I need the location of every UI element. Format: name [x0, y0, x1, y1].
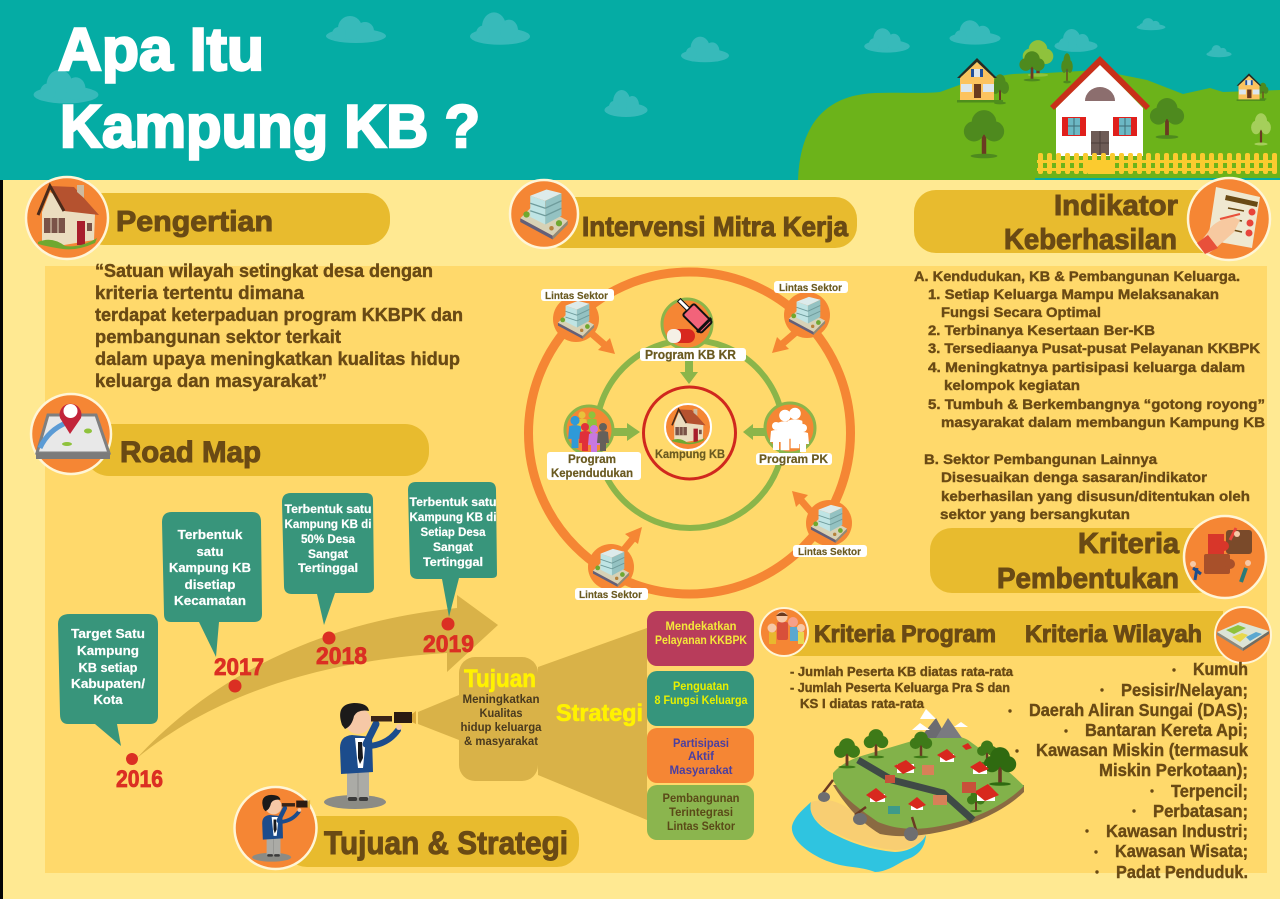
milestone 2019: Tertinggal: [423, 555, 483, 569]
node: program pk: Program PK: [759, 452, 828, 466]
milestone 2016: KB setiap: [78, 660, 138, 675]
trees: [964, 40, 1271, 158]
centre node: kampung kb: Kampung KB: [655, 447, 725, 461]
milestone 2017: satu: [196, 544, 224, 559]
strategy box 4: [647, 785, 754, 840]
node: lintas sektor bottom right: [793, 500, 867, 558]
node: lintas sektor top right: [774, 281, 848, 338]
strategy box 1: Mendekatkan: [666, 621, 736, 633]
illustration: village island: [792, 709, 1024, 872]
kriteria wilayah list: Miskin Perkotaan);: [1099, 760, 1248, 780]
strategy box 2: Penguatan: [673, 681, 729, 693]
icon: puzzle: [1184, 516, 1266, 598]
strategy box 1: Pelayanan KKBPK: [655, 635, 748, 647]
kriteria wilayah list: Pesisir/Nelayan;: [1121, 680, 1248, 700]
centre node: kampung kb: [655, 404, 725, 461]
milestone 2018: Kampung KB di: [284, 517, 372, 531]
node: program kb kr: [640, 293, 746, 362]
kriteria wilayah list: Kawasan Wisata;: [1115, 841, 1248, 861]
indikator list: 3. Tersediaanya Pusat-pusat Pelayanan KKBPK: [928, 340, 1260, 356]
milestone 2017: Kampung KB: [169, 560, 251, 575]
strategy box 3: Aktif: [688, 751, 714, 763]
definition text: dalam upaya meningkatkan kualitas hidup: [95, 349, 460, 369]
node: lintas sektor top right: Lintas Sektor: [779, 282, 842, 294]
tujuan box: hidup keluarga: [460, 720, 542, 734]
milestone 2016: Kabupaten/: [71, 676, 145, 691]
icon: house: [26, 177, 108, 259]
node: program pk: [756, 403, 832, 466]
strategy box 1: [647, 611, 754, 666]
milestone 2019: Kampung KB di: [410, 510, 496, 524]
kriteria wilayah list: Perbatasan;: [1153, 801, 1248, 821]
milestone 2019: 2019: [423, 631, 474, 658]
main house: [1050, 56, 1150, 156]
main content panel: [45, 266, 1267, 873]
panel: tujuan dan strategi: [234, 611, 754, 869]
strategy box 3: Masyarakat: [670, 765, 733, 777]
heading bar: kriteria program dan wilayah: [790, 611, 1223, 656]
indikator list: 5. Tumbuh & Berkembangnya “gotong royong”: [928, 396, 1265, 412]
milestone 2017: disetiap: [184, 577, 236, 592]
node: lintas sektor bottom left: Lintas Sektor: [579, 589, 642, 601]
icon: family: [760, 608, 808, 656]
strategy box 4: Terintegrasi: [669, 807, 733, 819]
panel: kriteria wilayah: [1008, 607, 1271, 882]
header banner: [0, 0, 1280, 180]
icon: map block: [1215, 607, 1271, 663]
indikator list: Disesuaikan denga sasaran/indikator: [941, 469, 1208, 485]
indikator list: masyarakat dalam membangun Kampung KB: [941, 414, 1265, 430]
small house left: [957, 58, 1003, 102]
kriteria program list: - Jumlah Peserta KB diatas rata-rata: [790, 664, 1014, 679]
indikator list: 2. Terbinanya Kesertaan Ber-KB: [928, 322, 1155, 338]
heading: kriteria pembentukan: Pembentukan: [997, 563, 1179, 595]
milestone 2017: 2017: [214, 654, 264, 681]
milestone 2019: Sangat: [433, 540, 473, 554]
title: Kampung KB ?: [60, 93, 480, 160]
heading: kriteria pembentukan: [930, 528, 1220, 595]
indikator list: B. Sektor Pembangunan Lainnya: [924, 451, 1157, 467]
milestone 2019: Terbentuk satu: [410, 495, 496, 509]
kriteria wilayah list: Bantaran Kereta Api;: [1085, 720, 1248, 740]
indikator list: sektor yang bersangkutan: [940, 506, 1130, 522]
milestone 2017: Terbentuk: [178, 527, 243, 542]
icon: checklist: [1188, 178, 1270, 260]
kriteria wilayah list: Kawasan Miskin (termasuk: [1036, 740, 1248, 760]
small house right: [1237, 73, 1265, 101]
tujuan box: & masyarakat: [464, 734, 538, 748]
strategy box 4: Pembangunan: [662, 793, 740, 805]
node: program kependudukan: Program: [568, 452, 616, 466]
tujuan box: [459, 657, 542, 781]
timeline arrow: [137, 595, 498, 758]
heading: pengertian: [80, 193, 390, 245]
arrows: programs to centre: [612, 360, 767, 441]
heading: indikator keberhasilan: Keberhasilan: [1004, 224, 1177, 256]
kriteria program list: - Jumlah Peserta Keluarga Pra S dan: [790, 680, 1010, 695]
panel: intervensi mitra kerja: [510, 180, 867, 601]
indikator list: kelompok kegiatan: [944, 377, 1080, 393]
milestone 2017: Kecamatan: [174, 593, 246, 608]
kriteria wilayah list: Terpencil;: [1171, 781, 1248, 801]
kriteria program list: [790, 664, 1014, 711]
node: lintas sektor bottom right: Lintas Sektor: [798, 546, 861, 558]
indikator list: A. Kendudukan, KB & Pembangunan Keluarga.: [914, 268, 1240, 284]
beam from telescope: [418, 628, 647, 820]
heading: intervensi mitra kerja: [540, 197, 857, 248]
indikator list: 1. Setiap Keluarga Mampu Melaksanakan: [928, 286, 1219, 302]
icon: man in circle: [234, 787, 316, 869]
milestone 2018: 2018: [316, 643, 367, 670]
title: Apa Itu: [58, 16, 264, 83]
arrowheads orange: [598, 337, 808, 544]
milestone 2019: Setiap Desa: [420, 525, 486, 539]
icon: map tablet with pin: [31, 394, 111, 474]
heading: tujuan dan strategi: Tujuan & Strategi: [324, 825, 568, 861]
node: program kependudukan: [547, 406, 641, 480]
strategy box 2: [647, 671, 754, 726]
milestone 2018: Terbentuk satu: [284, 502, 372, 516]
definition text: [95, 261, 463, 391]
definition text: pembangunan sektor terkait: [95, 327, 341, 347]
strategy box 3: [647, 728, 754, 783]
strategy box 3: Partisipasi: [673, 738, 729, 750]
heading: tujuan dan strategi: [285, 816, 579, 867]
heading bar: kriteria program dan wilayah: Kriteria Wilayah: [1025, 621, 1202, 648]
heading: indikator keberhasilan: [914, 190, 1224, 256]
definition text: terdapat keterpaduan program KKBPK dan: [95, 305, 463, 325]
milestone 2017: [162, 512, 264, 692]
milestone 2018: 50% Desa: [301, 532, 355, 546]
title: [58, 16, 480, 160]
panel: kriteria program: [760, 608, 1223, 872]
picket fence: [1037, 153, 1277, 174]
kriteria wilayah list: Daerah Aliran Sungai (DAS);: [1029, 700, 1248, 720]
milestone 2016: Kota: [94, 692, 123, 707]
milestone 2018: Sangat: [308, 547, 348, 561]
heading: kriteria pembentukan: Kriteria: [1078, 528, 1180, 560]
kriteria wilayah list: Padat Penduduk.: [1116, 862, 1248, 882]
indikator list: [914, 268, 1265, 522]
panel: indikator keberhasilan: [914, 178, 1270, 522]
strategi label: Strategi: [556, 700, 643, 727]
heading: road map: [85, 424, 429, 476]
milestone 2019: [408, 482, 497, 658]
heading: road map: Road Map: [120, 436, 261, 469]
icon: building: [510, 180, 578, 248]
panel: road map: [31, 394, 498, 793]
node: program kependudukan: Kependudukan: [551, 466, 633, 480]
kriteria wilayah list: [1008, 659, 1248, 882]
tujuan box: Meningkatkan: [462, 692, 540, 706]
tujuan box: Kualitas: [480, 706, 523, 720]
kriteria wilayah list: Kumuh: [1193, 659, 1248, 679]
hill landscape: [798, 40, 1280, 180]
indikator list: keberhasilan yang disusun/ditentukan oleh: [941, 488, 1250, 504]
definition text: “Satuan wilayah setingkat desa dengan: [95, 261, 433, 281]
definition text: kriteria tertentu dimana: [95, 283, 305, 303]
milestone 2018: [282, 493, 374, 670]
definition text: keluarga dan masyarakat”: [95, 371, 327, 391]
strategy box 4: Lintas Sektor: [667, 821, 735, 833]
milestone 2016: [58, 614, 163, 793]
heading bar: kriteria program dan wilayah: Kriteria Program: [814, 621, 996, 648]
heading: pengertian: Pengertian: [116, 206, 273, 238]
node: lintas sektor top left: Lintas Sektor: [545, 290, 608, 302]
arrows: sectors to program ring: [591, 333, 812, 552]
heading: intervensi mitra kerja: Intervensi Mitra Kerja: [582, 211, 848, 242]
orbit diagram: [528, 272, 867, 601]
milestone 2018: Tertinggal: [298, 561, 358, 575]
milestone 2016: Kampung: [77, 643, 139, 658]
node: lintas sektor bottom left: [575, 544, 648, 601]
panel: kriteria pembentukan: [930, 516, 1266, 598]
milestone 2016: 2016: [116, 766, 163, 793]
milestone 2016: Target Satu: [71, 626, 145, 641]
strategy box 2: 8 Fungsi Keluarga: [654, 695, 748, 707]
indikator list: Fungsi Secara Optimal: [941, 304, 1101, 320]
kriteria program list: KS I diatas rata-rata: [800, 696, 925, 711]
kriteria wilayah list: Kawasan Industri;: [1106, 821, 1248, 841]
illustration: man with telescope: [324, 703, 416, 809]
panel: pengertian: [26, 177, 463, 391]
node: lintas sektor top left: [541, 289, 614, 342]
clouds: [34, 12, 1232, 117]
node: program kb kr: Program KB KR: [645, 348, 736, 362]
heading: indikator keberhasilan: Indikator: [1054, 190, 1178, 222]
indikator list: 4. Meningkatnya partisipasi keluarga dalam: [928, 359, 1245, 375]
tujuan box: Tujuan: [464, 665, 536, 693]
